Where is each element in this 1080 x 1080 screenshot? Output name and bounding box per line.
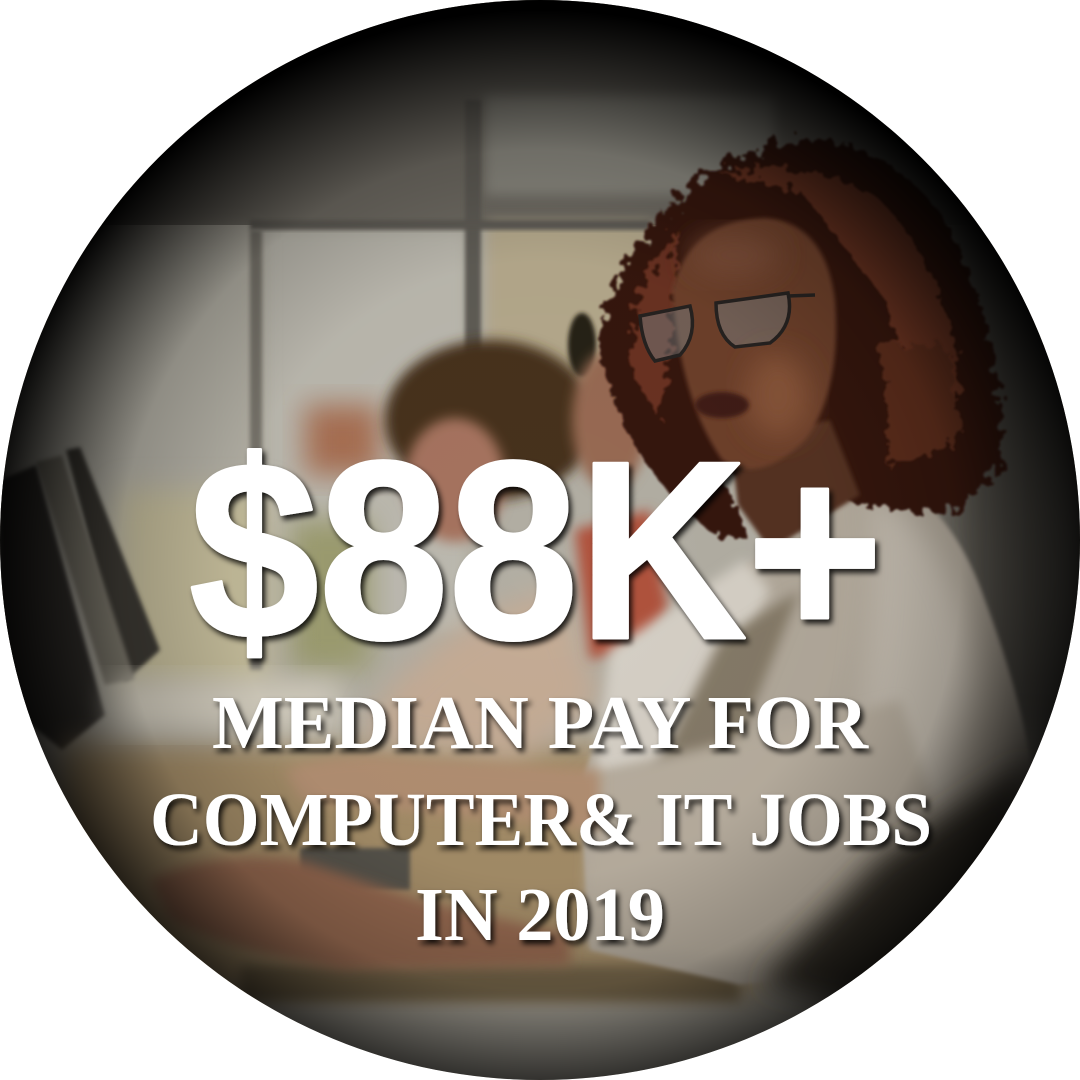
headline figure: $88K+: $88K+: [189, 408, 883, 692]
main subject: woman with glasses: [580, 140, 1035, 1010]
neck: [730, 420, 860, 550]
background colleague: [360, 313, 668, 760]
caption line 2: COMPUTER& IT JOBS: [150, 778, 932, 862]
lips: [695, 392, 749, 418]
desk and lower scene: [60, 680, 760, 1001]
face: [672, 218, 836, 469]
caption line 1: MEDIAN PAY FOR: [212, 681, 869, 765]
caption: median pay for computer and IT jobs in 2019: [150, 681, 932, 957]
glasses: [640, 293, 815, 361]
caption line 3: IN 2019: [415, 873, 665, 957]
hair: [600, 140, 1002, 540]
icon: computer monitors at left: [0, 447, 160, 750]
sweater: [580, 475, 1035, 985]
hands on keyboard: [150, 757, 600, 970]
